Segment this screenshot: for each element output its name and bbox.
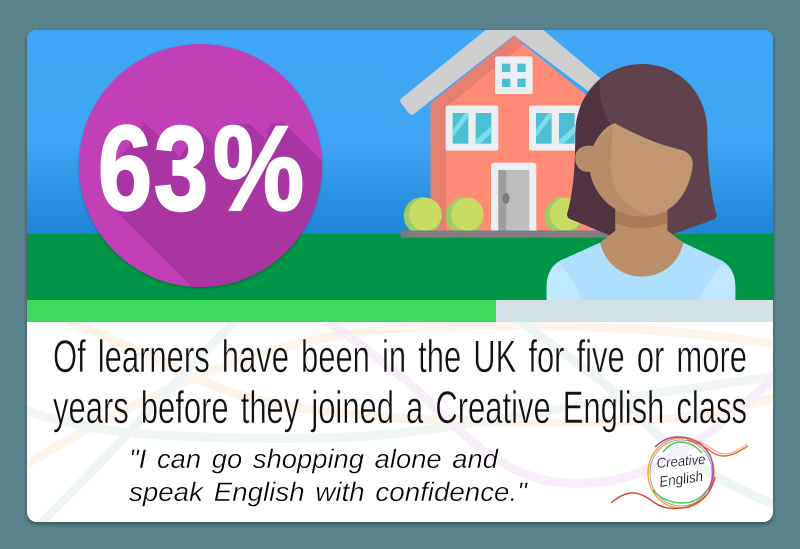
logo word: Creative: Creative [656, 451, 706, 471]
sky [27, 30, 773, 234]
door [491, 163, 536, 231]
logo wordmark [656, 451, 706, 491]
logo: Creative English [611, 437, 748, 508]
quote line two: speak English with confidence." [129, 477, 528, 507]
long shadow [116, 122, 322, 287]
panel: scene [27, 30, 773, 303]
digit 6: 6 [98, 102, 152, 236]
logo word: English: English [658, 468, 704, 491]
percent sign: % [213, 102, 304, 236]
bushes [404, 197, 581, 231]
hair back [567, 64, 717, 236]
grass [27, 234, 773, 300]
neck [600, 207, 683, 277]
shirt [547, 243, 735, 303]
description text [53, 331, 747, 433]
progress bar [27, 300, 773, 322]
quote [129, 444, 528, 507]
background ribbons [20, 316, 780, 526]
digit 3: 3 [154, 102, 208, 236]
face [575, 123, 693, 217]
icon: woman [547, 64, 735, 303]
house roof [400, 30, 603, 115]
purple circle badge [79, 44, 335, 300]
right window [529, 106, 582, 151]
icon: house [400, 30, 611, 238]
quote line one: "I can go shopping alone and [129, 444, 499, 474]
stat: 63% [98, 102, 304, 236]
house ground ledge [401, 231, 611, 238]
attic window [495, 56, 533, 94]
house walls [431, 37, 597, 231]
left window [446, 106, 498, 151]
